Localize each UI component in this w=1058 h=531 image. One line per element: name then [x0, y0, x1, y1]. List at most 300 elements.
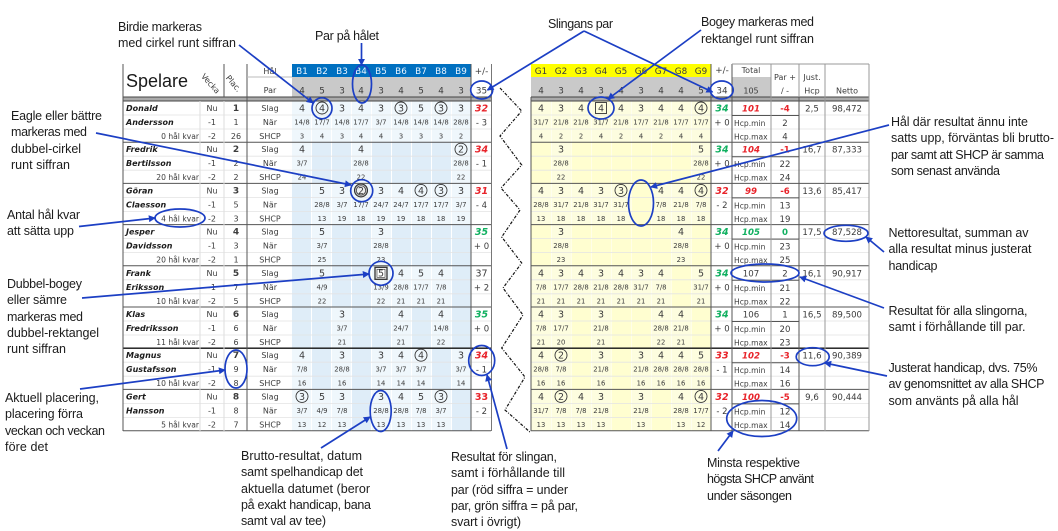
- row: Frank Eriksson: Eriksson: [126, 283, 164, 292]
- row: Klas Fredriksson: -2: [208, 338, 216, 347]
- row: Frank Eriksson: + 2: [474, 283, 489, 293]
- row: Fredrik Bertilsson: 34: [475, 145, 488, 156]
- row: Klas Fredriksson: + 0: [474, 324, 489, 334]
- row: Klas Fredriksson results: 1: [782, 310, 788, 320]
- row: Jesper Davidsson: 3: [233, 242, 239, 251]
- row: Frank Eriksson results: 28/8: [613, 283, 629, 291]
- row: Fredrik Bertilsson: 2: [233, 159, 239, 168]
- row: Frank Eriksson: 28/8: [393, 283, 409, 291]
- row: Gert Hansson: -2: [208, 420, 216, 429]
- row: Donald Andersson: 1: [233, 118, 239, 127]
- row: Fredrik Bertilsson: 2: [233, 145, 239, 155]
- arrow: Eagle to double circle: [96, 133, 373, 202]
- row: Gert Hansson: 4: [398, 392, 404, 403]
- callout: Minsta respektive: under säsongen: [707, 489, 792, 503]
- row: Fredrik Bertilsson: 24: [298, 174, 306, 182]
- row: Gert Hansson: 3: [339, 392, 345, 403]
- row: Donald Andersson: 17/7: [314, 118, 330, 126]
- row: Gert Hansson results: 12: [697, 421, 705, 429]
- row: Gert Hansson results: 28/8: [673, 407, 689, 415]
- row: Göran Claesson: - 4: [476, 201, 487, 211]
- row: Göran Claesson: 19: [377, 215, 385, 223]
- row: Donald Andersson results: 2: [559, 132, 563, 140]
- header labels: G5: [615, 67, 627, 77]
- row: Göran Claesson results: 31/7: [593, 201, 609, 209]
- row: Göran Claesson: 3: [233, 186, 239, 196]
- row: Klas Fredriksson: Nu: [206, 310, 218, 319]
- header labels: 3: [458, 86, 464, 96]
- row: Göran Claesson results: 3: [598, 186, 604, 197]
- row: Klas Fredriksson results: 7/8: [535, 324, 547, 332]
- row: Klas Fredriksson results: 3: [558, 310, 564, 320]
- row: Donald Andersson: 1: [233, 104, 239, 114]
- row: Magnus Gustafsson: Slag: [261, 351, 279, 360]
- row: Donald Andersson results: 98,472: [832, 104, 862, 114]
- header labels: Hål: [263, 66, 277, 76]
- row: Klas Fredriksson results: 28/8: [653, 324, 669, 332]
- row: Magnus Gustafsson: 34: [475, 351, 488, 362]
- row: Gert Hansson: - 2: [476, 407, 487, 417]
- row: Donald Andersson: 26: [231, 132, 241, 141]
- row: Donald Andersson results: 31/7: [533, 118, 549, 126]
- row: Frank Eriksson results: 21: [657, 297, 665, 305]
- row: Fredrik Bertilsson: SHCP: [259, 173, 281, 182]
- callout: Birdie: Birdie markeras: [118, 20, 202, 34]
- rotated header: Plac.: Plac.: [224, 74, 243, 94]
- row: Frank Eriksson: Frank: [126, 269, 152, 278]
- callout: Aktuell placering: före det: [5, 440, 49, 454]
- arrow: gross result: [321, 390, 391, 448]
- row: Göran Claesson: 24/7: [373, 201, 389, 209]
- row: Fredrik Bertilsson results: [531, 142, 869, 184]
- row: Göran Claesson results: 85,417: [832, 187, 862, 197]
- row: Donald Andersson: - 3: [476, 118, 487, 128]
- row: Frank Eriksson results: 17/7: [553, 283, 569, 291]
- row: Fredrik Bertilsson: 4: [299, 145, 305, 156]
- row: Frank Eriksson results: 31/7: [633, 283, 649, 291]
- row: Göran Claesson: -1: [208, 200, 216, 209]
- row: Klas Fredriksson results: [531, 307, 869, 348]
- row: Gert Hansson: 3/7: [296, 407, 308, 415]
- row: Göran Claesson: -2: [208, 214, 216, 223]
- row: Magnus Gustafsson results: 2: [558, 351, 564, 362]
- row: Klas Fredriksson results: 17/7: [553, 324, 569, 332]
- header labels: 35: [476, 86, 487, 96]
- header labels: +/-: [715, 66, 729, 76]
- row: Göran Claesson: [123, 183, 491, 224]
- header labels: 4: [299, 86, 305, 96]
- row: Donald Andersson results: 2: [659, 132, 663, 140]
- arrow: Bogey rectangle: [588, 30, 701, 119]
- row: Gert Hansson: SHCP: [259, 420, 281, 429]
- row: Magnus Gustafsson: 14: [397, 380, 405, 388]
- row: Magnus Gustafsson results: 33: [715, 351, 729, 362]
- row: Donald Andersson results: 3: [638, 104, 644, 114]
- row: Fredrik Bertilsson: -1: [208, 159, 216, 168]
- row: Gert Hansson: Slag: [261, 392, 279, 401]
- row: Donald Andersson results: 21/8: [553, 118, 569, 126]
- row: Jesper Davidsson results: Hcp.max: [734, 256, 768, 265]
- row: Magnus Gustafsson results: [531, 348, 869, 390]
- row: Donald Andersson: 3: [300, 132, 304, 140]
- row: Frank Eriksson results: 3: [558, 268, 564, 279]
- row: Göran Claesson results: 32: [715, 186, 729, 197]
- header labels: 3: [339, 86, 345, 96]
- row: Magnus Gustafsson: 14: [457, 380, 465, 388]
- row: Göran Claesson: 3: [378, 186, 384, 197]
- row: Magnus Gustafsson results: 3: [638, 351, 644, 362]
- row: Donald Andersson results: 4: [698, 104, 704, 114]
- row: Gert Hansson results: 31/7: [533, 407, 549, 415]
- table rules: [531, 64, 869, 431]
- row: Frank Eriksson results: Hcp.max: [734, 297, 768, 306]
- row: Klas Fredriksson: 3/7: [336, 324, 348, 332]
- row: Gert Hansson results: [531, 389, 869, 431]
- row: Magnus Gustafsson results: 28/8: [673, 366, 689, 374]
- row: Magnus Gustafsson results: 4: [538, 351, 544, 362]
- row: Donald Andersson: 3: [398, 104, 404, 114]
- row: Frank Eriksson results: Hcp.min: [734, 284, 766, 293]
- header labels: G8: [675, 67, 687, 77]
- row: Klas Fredriksson: 6: [233, 310, 239, 320]
- row: Gert Hansson: 4/9: [316, 407, 328, 415]
- row: Gert Hansson results: 13: [557, 421, 565, 429]
- row: Magnus Gustafsson: 7: [233, 351, 239, 361]
- row: Fredrik Bertilsson: 22: [357, 174, 365, 182]
- row: Göran Claesson: 17/7: [433, 201, 449, 209]
- header labels: 5: [319, 86, 325, 96]
- row: Jesper Davidsson results: 25: [780, 256, 790, 266]
- row: Klas Fredriksson results: 21: [597, 338, 605, 346]
- row: Gert Hansson results: 13: [537, 421, 545, 429]
- header labels: 3: [598, 86, 604, 96]
- row: Fredrik Bertilsson results: 24: [780, 174, 790, 184]
- row: Jesper Davidsson: 3/7: [316, 242, 328, 250]
- callout: Aktuell placering: placering förra: [5, 407, 83, 421]
- header labels: 4: [438, 86, 444, 96]
- header labels: 34: [716, 86, 728, 96]
- row: Gert Hansson results: 21/8: [593, 407, 609, 415]
- row: Frank Eriksson results: 21/8: [593, 283, 609, 291]
- arrow: double rectangle: [82, 261, 393, 298]
- row: Göran Claesson: 18: [357, 215, 365, 223]
- row: Gert Hansson results: 4: [698, 392, 704, 403]
- row: Gert Hansson results: 3: [598, 392, 604, 403]
- arrow: placement: [80, 350, 247, 389]
- callout: Bogey: Bogey markeras med: [701, 15, 814, 29]
- row: Frank Eriksson: 22: [377, 297, 385, 305]
- callout: Dubbel-bogey: eller sämre: [7, 293, 67, 307]
- row: Magnus Gustafsson results: 21/8: [633, 366, 649, 374]
- arrow: total result: [731, 264, 884, 308]
- row: Jesper Davidsson: Nu: [206, 228, 218, 237]
- header labels: Just.: [802, 73, 821, 82]
- row: Frank Eriksson: 7: [233, 283, 239, 292]
- row: Donald Andersson: Andersson: [125, 118, 174, 127]
- row: Jesper Davidsson results: 3: [558, 227, 564, 238]
- row: Magnus Gustafsson results: 16: [677, 380, 685, 388]
- row: Frank Eriksson: 17/7: [413, 283, 429, 291]
- row: Donald Andersson results: 4: [618, 104, 624, 114]
- row: Fredrik Bertilsson results: -1: [780, 146, 790, 156]
- row: Gert Hansson results: 7/8: [555, 407, 567, 415]
- callout: Justerat handicap: av genomsnittet av alla SHCP: [888, 377, 1044, 391]
- row: Gert Hansson results: 9,6: [805, 393, 819, 403]
- row: Magnus Gustafsson: 4: [418, 351, 424, 362]
- row: Donald Andersson results: 4: [598, 104, 604, 114]
- header labels: 5: [698, 86, 704, 96]
- row: Klas Fredriksson results: 34: [715, 310, 729, 320]
- row: Donald Andersson: 4: [320, 132, 324, 140]
- row: Gert Hansson: [123, 389, 491, 430]
- row: Göran Claesson: 3/7: [455, 201, 467, 209]
- row: Donald Andersson results: 4: [639, 132, 643, 140]
- row: Donald Andersson: 32: [475, 104, 488, 114]
- row: Frank Eriksson results: 21: [697, 297, 705, 305]
- row: Donald Andersson results: Hcp.min: [734, 119, 766, 128]
- row: Frank Eriksson results: 107: [743, 269, 759, 279]
- arrows: loop par: [471, 31, 733, 99]
- row: Donald Andersson: 0 hål kvar: [161, 132, 200, 141]
- row: Göran Claesson results: 13: [537, 215, 545, 223]
- callout: Nettoresultat: alla resultat minus justerat: [888, 242, 1032, 256]
- header labels: G3: [575, 67, 587, 77]
- row: Magnus Gustafsson results: 5: [698, 351, 704, 362]
- row: Klas Fredriksson: 21: [338, 338, 346, 346]
- row: Göran Claesson results: - 2: [716, 201, 728, 211]
- row: Klas Fredriksson: 6: [233, 338, 239, 347]
- row: Göran Claesson: 3: [233, 214, 239, 223]
- callout: Dubbel-bogey: dubbel-rektangel: [7, 326, 99, 340]
- row: Göran Claesson results: 31/7: [553, 201, 569, 209]
- row: Jesper Davidsson: [123, 225, 491, 266]
- row: Göran Claesson: 3/7: [336, 201, 348, 209]
- row: Jesper Davidsson results: 28/8: [553, 242, 569, 250]
- row: Frank Eriksson: 5: [319, 268, 325, 279]
- row: Donald Andersson results: 4: [539, 132, 543, 140]
- row: Gert Hansson: 28/8: [393, 407, 409, 415]
- row: Fredrik Bertilsson results: 22: [697, 174, 705, 182]
- row: Donald Andersson results: 2: [782, 119, 788, 129]
- row: Jesper Davidsson: Slag: [261, 228, 279, 237]
- row: Göran Claesson results: 7/8: [655, 201, 667, 209]
- header labels: B7: [415, 67, 427, 77]
- row: Donald Andersson results: 3: [558, 104, 564, 114]
- arrow: min and max SHCP: [718, 400, 797, 451]
- row: Donald Andersson: 3: [419, 132, 423, 140]
- row: Frank Eriksson results: 4: [658, 268, 664, 279]
- row: Göran Claesson: 13: [318, 215, 326, 223]
- arrow: Birdie to circled digit: [239, 45, 332, 119]
- row: Donald Andersson results: 4: [599, 132, 603, 140]
- row: Klas Fredriksson: 22: [437, 338, 445, 346]
- row: Jesper Davidsson: 3: [378, 227, 384, 238]
- row: Fredrik Bertilsson: -2: [208, 173, 216, 182]
- row: Klas Fredriksson: Slag: [261, 310, 279, 319]
- row: Magnus Gustafsson results: 28/8: [653, 366, 669, 374]
- callout: Resultat för alla slingorna: samt i förhållande till par.: [888, 320, 1026, 334]
- row: Göran Claesson: När: [263, 200, 278, 209]
- row: Frank Eriksson: 21: [417, 297, 425, 305]
- row: Magnus Gustafsson: 14: [377, 380, 385, 388]
- callout: Eagle: [11, 109, 102, 172]
- row: Göran Claesson: Claesson: [126, 200, 166, 209]
- row: Donald Andersson: 4: [299, 104, 305, 114]
- row: Donald Andersson results: 21/8: [573, 118, 589, 126]
- row: Fredrik Bertilsson results: 87,333: [832, 146, 862, 156]
- row: Gert Hansson: 33: [475, 392, 488, 403]
- row: Gert Hansson: 28/8: [373, 407, 389, 415]
- row: Göran Claesson results: Hcp.max: [734, 215, 768, 224]
- row: Fredrik Bertilsson: När: [263, 159, 278, 168]
- row: Gert Hansson: 3/7: [435, 407, 447, 415]
- row: Göran Claesson results: 18: [657, 215, 665, 223]
- row: Donald Andersson results: 2,5: [805, 104, 819, 114]
- row: Magnus Gustafsson: 28/8: [334, 366, 350, 374]
- row: Gert Hansson: Hansson: [126, 406, 165, 415]
- row: Gert Hansson: 5 hål kvar: [161, 420, 200, 429]
- callout: Minsta respektive: Minsta respektive: [707, 456, 800, 470]
- header labels: 4: [398, 86, 404, 96]
- row: Frank Eriksson: 21: [397, 297, 405, 305]
- row: Göran Claesson results: 4: [538, 186, 544, 197]
- row: Frank Eriksson results: 4: [538, 268, 544, 279]
- callout: Dubbel-bogey: [7, 277, 99, 356]
- row: Fredrik Bertilsson: 20 hål kvar: [156, 173, 200, 182]
- header labels: B6: [395, 67, 407, 77]
- row: Göran Claesson results: 18: [617, 215, 625, 223]
- row: Jesper Davidsson results: 4: [678, 227, 684, 238]
- row: Klas Fredriksson results: 21/8: [593, 324, 609, 332]
- row: Fredrik Bertilsson results: + 0: [714, 160, 730, 170]
- row: Klas Fredriksson results: 16,5: [802, 310, 822, 320]
- row: Frank Eriksson: 5: [378, 268, 384, 279]
- callout: Dubbel-bogey: runt siffran: [7, 342, 66, 356]
- arrow: adjusted handicap: [796, 348, 887, 376]
- row: Fredrik Bertilsson: 28/8: [353, 160, 369, 168]
- row: Donald Andersson: Nu: [206, 104, 218, 113]
- arrow: loop result: [469, 346, 507, 449]
- row: Frank Eriksson results: 16,1: [802, 269, 822, 279]
- row: Jesper Davidsson: 25: [318, 256, 326, 264]
- row: Göran Claesson: 28/8: [314, 201, 330, 209]
- row: Magnus Gustafsson: 3/7: [395, 366, 407, 374]
- arrow: empty holes: [628, 125, 889, 226]
- row: Gert Hansson: 13: [298, 421, 306, 429]
- row: Göran Claesson: 3: [438, 186, 444, 197]
- header labels: G9: [695, 67, 707, 77]
- row: Jesper Davidsson results: + 0: [714, 242, 730, 252]
- header labels: 3: [638, 86, 644, 96]
- row: Magnus Gustafsson: Gustafsson: [126, 365, 177, 374]
- row: Göran Claesson results: -6: [780, 187, 790, 197]
- header labels: 4: [678, 86, 684, 96]
- row: Donald Andersson: 3: [339, 104, 345, 114]
- row: Göran Claesson: 3: [339, 186, 345, 197]
- row: Frank Eriksson: -1: [208, 283, 216, 292]
- callout: Eagle: markeras med: [11, 125, 87, 139]
- row: Fredrik Bertilsson results: 28/8: [553, 160, 569, 168]
- header labels: 5: [418, 86, 424, 96]
- row: Gert Hansson: 13: [437, 421, 445, 429]
- row: Frank Eriksson: Nu: [206, 269, 218, 278]
- row: Fredrik Bertilsson: Fredrik: [126, 145, 158, 154]
- heading: Spelare: Spelare: [126, 71, 188, 91]
- row: Frank Eriksson: [123, 266, 491, 307]
- callout: Nettoresultat: Nettoresultat, summan av: [888, 226, 1029, 240]
- row: Frank Eriksson results: 2: [782, 269, 788, 279]
- row: Magnus Gustafsson: 3/7: [415, 366, 427, 374]
- row: Frank Eriksson results: 21: [780, 284, 790, 294]
- row: Göran Claesson results: 21/8: [573, 201, 589, 209]
- row: Göran Claesson: 5: [319, 186, 325, 197]
- row: Donald Andersson: -1: [208, 118, 216, 127]
- row: Frank Eriksson results: 21: [557, 297, 565, 305]
- row: Fredrik Bertilsson: Bertilsson: [126, 159, 172, 168]
- row: Donald Andersson: 14/8: [294, 118, 310, 126]
- row: Jesper Davidsson results: 87,528: [832, 228, 862, 238]
- header labels: G2: [555, 67, 567, 77]
- row: Klas Fredriksson: SHCP: [259, 338, 281, 347]
- row: Klas Fredriksson: 6: [233, 324, 239, 333]
- header labels: 105: [743, 86, 759, 96]
- row: Frank Eriksson results: 4: [578, 268, 584, 279]
- row: Donald Andersson: 14/8: [393, 118, 409, 126]
- row: Gert Hansson results: Hcp.min: [734, 407, 766, 416]
- row: Magnus Gustafsson: 7/8: [296, 366, 308, 374]
- row: Klas Fredriksson: Klas: [126, 310, 145, 319]
- row: Magnus Gustafsson results: 7/8: [555, 366, 567, 374]
- header labels: Total: [741, 66, 760, 75]
- row: Gert Hansson results: 13: [577, 421, 585, 429]
- row: Frank Eriksson: 4/9: [316, 283, 328, 291]
- callout: Bogey: [701, 15, 814, 46]
- row: Magnus Gustafsson: - 1: [476, 366, 487, 376]
- callout: Resultat för slingan: par, grön siffra = på par,: [451, 499, 578, 513]
- row: Donald Andersson: 28/8: [453, 118, 469, 126]
- row: Frank Eriksson results: 21: [637, 297, 645, 305]
- row: Jesper Davidsson results: 34: [715, 227, 729, 238]
- row: Frank Eriksson results: 7/8: [535, 283, 547, 291]
- row: Klas Fredriksson results: Hcp.min: [734, 325, 766, 334]
- arrow: net result: [824, 225, 884, 252]
- row: Göran Claesson results: Hcp.min: [734, 201, 766, 210]
- row: Donald Andersson: 3: [378, 104, 384, 114]
- row: Jesper Davidsson results: 0: [782, 228, 788, 238]
- row: Göran Claesson: 4 hål kvar: [161, 214, 200, 223]
- row: Donald Andersson: När: [263, 118, 278, 127]
- row: Gert Hansson: 5: [418, 392, 424, 403]
- row: Magnus Gustafsson results: 90,389: [832, 352, 862, 362]
- row: Jesper Davidsson: -1: [208, 242, 216, 251]
- row: Göran Claesson: Göran: [126, 186, 153, 195]
- callout: Par på hålet: Par på hålet: [315, 29, 380, 43]
- row: Fredrik Bertilsson results: 28/8: [693, 160, 709, 168]
- row: Magnus Gustafsson results: - 1: [716, 366, 728, 376]
- row: Jesper Davidsson: 28/8: [373, 242, 389, 250]
- header labels: B3: [336, 67, 348, 77]
- row: Frank Eriksson: 22: [318, 297, 326, 305]
- row: Magnus Gustafsson results: 16: [597, 380, 605, 388]
- row: Göran Claesson results: 18: [577, 215, 585, 223]
- row: Gert Hansson results: Hcp.max: [734, 421, 768, 430]
- header labels: [535, 66, 858, 96]
- row: Donald Andersson results: 17/7: [673, 118, 689, 126]
- row: Göran Claesson: 2: [358, 186, 364, 197]
- row: Göran Claesson: 19: [338, 215, 346, 223]
- callout: Eagle: runt siffran: [11, 158, 70, 172]
- row: Donald Andersson results: 4: [699, 132, 703, 140]
